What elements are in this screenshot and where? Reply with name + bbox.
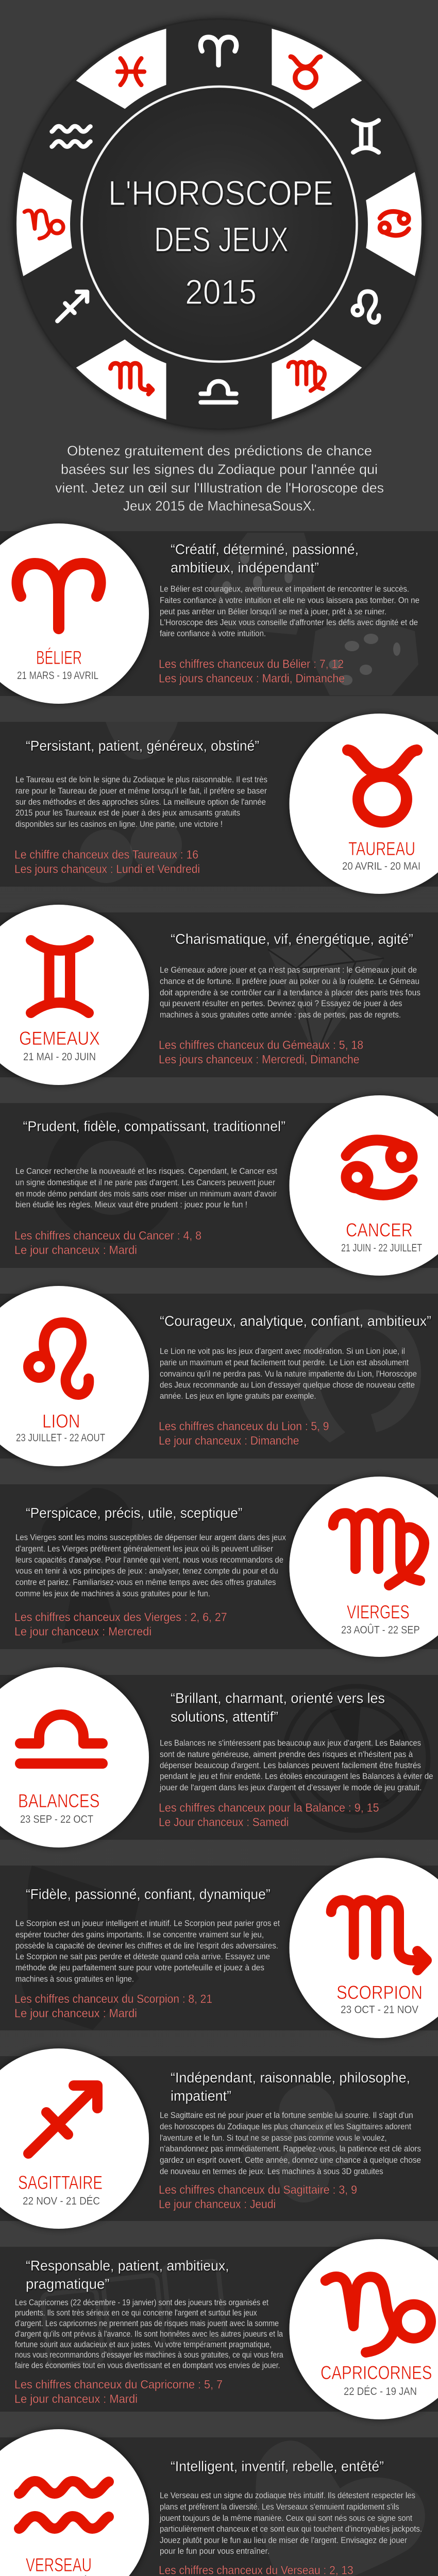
intro text: vient. Jetez un œil sur l'Illustration de l'Horoscope des [55, 480, 384, 496]
description: d'argent qu'ils ont prévus à l'avance. Ils sont honnêtes avec les autres joueurs et la [15, 2330, 283, 2339]
dates: 22 NOV - 21 DÉC [23, 2195, 100, 2207]
sign badge: Gémeaux [0, 905, 149, 1085]
description: Faites confiance à votre intuition et elle ne vous laissera pas tomber. On ne [160, 596, 419, 605]
sign name: LION [42, 1411, 80, 1432]
description: Le Lion ne voit pas les jeux d'argent avec modération. Si un Lion joue, il [160, 1347, 405, 1356]
quote: pragmatique” [26, 2276, 109, 2292]
description: machines à sous gratuites cette année : pas de pertes, pas de regrets. [160, 1010, 401, 1020]
lucky numbers and days [159, 1801, 379, 1829]
description: L'Horoscope des Jeux vous conseille d'affronter les défis avec dignité et de [160, 618, 418, 628]
dates: 21 MARS - 19 AVRIL [17, 670, 98, 682]
sign badge: Capricornes [290, 2239, 438, 2419]
lucky numbers and days [14, 848, 200, 876]
icon: libra [20, 1715, 103, 1764]
icon: virgo (wheel) [288, 362, 325, 391]
sign name: GEMEAUX [19, 1028, 100, 1049]
icon: leo (wheel) [353, 292, 379, 323]
description: gardez un esprit ouvert. Cette année, donnez une chance à quelque chose [160, 2156, 421, 2165]
icon: cancer [346, 1140, 412, 1195]
dates: 23 SEP - 22 OCT [20, 1814, 93, 1825]
panel band [0, 1103, 438, 1268]
quote: “Créatif, déterminé, passionné, [171, 541, 359, 557]
panel: Capricornes [0, 2239, 438, 2419]
white wheel segments [0, 3, 438, 446]
description: faire confiance à votre intuition. [160, 629, 266, 638]
description: Le Taureau est de loin le signe du Zodiaque le plus raisonnable. Il est très [15, 775, 267, 784]
panel band [0, 912, 438, 1077]
description: n'abandonnez pas immédiatement. Rappelez-vous, la patience est clé alors [160, 2144, 421, 2154]
panel: Balances [0, 1667, 438, 1848]
lucky numbers and days: Le chiffre chanceux des Taureaux : 16 [14, 848, 198, 861]
description: fortune sourit aux audacieux et aux justes. Vu votre tempérament pragmatique, [15, 2340, 272, 2349]
description [15, 1533, 287, 1599]
icon: aries [17, 564, 100, 629]
description [160, 584, 419, 638]
panel: Gémeaux [0, 905, 438, 1085]
description: Le Gémeaux adore jouer et ça n'est pas surprenant : le Gémeaux jouit de [160, 965, 417, 975]
sign name: SCORPION [336, 1982, 423, 2003]
description: des Jeux recommande au Lion d'essayer quelque chose de nouveau cette [160, 1381, 415, 1390]
panel: Bélier [0, 523, 438, 704]
lucky numbers and days: Les chiffres chanceux du Cancer : 4, 8 [14, 1229, 201, 1242]
dates: 23 AOÛT - 22 SEP [341, 1624, 420, 1636]
description: Les Capricornes (22 décembre - 19 janvier) sont des joueurs très organisés et [15, 2298, 268, 2307]
description: d'argent. Les capricornes ne prennent pas de risques mais jouent avec la somme [15, 2319, 279, 2328]
sign badge: Vierges [290, 1477, 438, 1657]
lucky numbers and days: Le jour chanceux : Jeudi [159, 2197, 276, 2211]
icon: capricorn [326, 2277, 431, 2352]
lucky numbers and days: Les chiffres chanceux des Vierges : 2, 6, 27 [14, 1611, 227, 1624]
panel: Cancer [0, 1095, 438, 1276]
lucky numbers and days: Les chiffres chanceux du Sagittaire : 3, 9 [159, 2183, 357, 2196]
watermark: poker chip [46, 1112, 177, 1243]
white circle [290, 1477, 438, 1657]
panel: Verseau [0, 2429, 438, 2576]
panel: Lion [0, 1286, 438, 1466]
description: pour le fun pour vous entraîner. [160, 2547, 269, 2556]
description: sur des méthodes et des approches sûres. La meilleure option de l'année [15, 798, 266, 807]
white circle [0, 1286, 149, 1466]
description: qui peuvent résulter en pertes. Devinez quoi ? Essayez de jouer à des [160, 999, 402, 1008]
description [160, 2111, 421, 2176]
lucky numbers and days [14, 1992, 212, 2020]
lucky numbers and days: Les chiffres chanceux du Lion : 5, 9 [159, 1419, 329, 1433]
quote: “Indépendant, raisonnable, philosophe, [171, 2070, 410, 2086]
quote: “Charismatique, vif, énergétique, agité” [171, 931, 413, 947]
dates: 23 OCT - 21 NOV [341, 2004, 418, 2016]
quote: ambitieux, indépendant” [171, 560, 319, 575]
watermark: diamond [268, 939, 384, 1057]
lucky numbers and days: Le jour chanceux : Mardi [14, 2392, 138, 2405]
lucky numbers and days: Les jours chanceux : Mardi, Dimanche [159, 672, 345, 685]
description: prudents. Ils sont très sérieux en ce qui concerne l'argent et surtout les jeux [15, 2309, 257, 2318]
sign name: SAGITTAIRE [18, 2172, 103, 2193]
description: bien étudié les règles. Mieux vaut être prudent : jouez pour le fun ! [15, 1200, 247, 1210]
icon: sagittarius (wheel) [57, 292, 87, 321]
sign name: BALANCES [18, 1790, 100, 1811]
quote [171, 2070, 410, 2104]
quote: “Perspicace, précis, utile, sceptique” [26, 1505, 242, 1521]
dates: 23 JUILLET - 22 AOUT [16, 1432, 105, 1444]
description: méthode de jeu parfaitement sure pour votre portefeuille et jouez à des [15, 1963, 264, 1972]
description [160, 965, 420, 1020]
description: espérer toucher des gains importants. Il se concentre vraiment sur le jeu, [15, 1930, 264, 1939]
description: faire des économies tout en vous divertissant et en domptant vos envies de jouer. [15, 2361, 280, 2370]
description: un signe domestique et il ne parie pas d'argent. Les Cancers peuvent jouer [15, 1178, 275, 1188]
sign name: CANCER [346, 1219, 413, 1241]
description: vous en tenir à vos principes de jeux : analyser, tenez compte du pour et du [15, 1567, 278, 1576]
panel band [0, 1675, 438, 1840]
panel band [0, 1484, 438, 1649]
white circle [0, 2048, 149, 2229]
panel band [0, 2437, 438, 2576]
lucky numbers and days [159, 657, 345, 685]
lucky numbers and days: Les chiffres chanceux du Gémeaux : 5, 18 [159, 1038, 363, 1052]
sign name: VERSEAU [26, 2554, 92, 2575]
icon: scorpio (wheel) [110, 363, 153, 394]
lucky numbers and days: Le jour chanceux : Dimanche [159, 1434, 299, 1447]
icon: scorpio [331, 1900, 427, 1970]
white circle [290, 2239, 438, 2419]
description: convaincu qu'il ne perdra pas. Vu la nature impatiente du Lion, l'Horoscope [160, 1369, 417, 1379]
description: en mode démo pendant des mois sans oser miser un minimum avant d'avoir [15, 1189, 277, 1198]
icon: cancer (wheel) [380, 211, 409, 235]
lucky numbers and days [14, 2378, 223, 2405]
title: DES JEUX [154, 220, 289, 259]
lucky numbers and days: Le Jour chanceux : Samedi [159, 1816, 289, 1829]
description: plans et préfèrent la diversité. Les Verseaux s'ennuient rapidement s'ils [160, 2502, 399, 2512]
description [15, 1919, 280, 1984]
description [15, 2298, 283, 2370]
description: disponibles sur les casinos en ligne. Une partie, une victoire ! [15, 820, 223, 829]
icon: capricorn (wheel) [24, 211, 63, 239]
description [159, 2491, 422, 2556]
description: Le Sagittaire est né pour jouer et la fortune semble lui sourire. Il s'agit d'un [160, 2111, 413, 2120]
sign badge: Bélier [0, 523, 149, 704]
icon: aries (wheel) [200, 37, 237, 65]
title [108, 174, 333, 312]
description [160, 1347, 417, 1401]
description [15, 775, 267, 829]
white circle [0, 523, 149, 704]
description [15, 1167, 277, 1210]
description: chance et de fortune. Il préfère jouer au poker ou à la roulette. Le Gémeau [160, 977, 419, 986]
description: des horoscopes du Zodiaque les plus chanceux et les Sagittaires adorent [160, 2122, 411, 2131]
description: Le Bélier est courageux, aventureux et impatient de rencontrer le succès. [160, 584, 409, 594]
panel band [0, 1866, 438, 2030]
icon: gemini (wheel) [353, 121, 379, 152]
intro text: Jeux 2015 de MachinesaSousX. [123, 498, 315, 514]
quote: “Courageux, analytique, confiant, ambitieux” [160, 1313, 431, 1329]
description: Le Scorpion ne sait pas perdre et déteste quand cela arrive. Essayez une [15, 1952, 270, 1961]
description: Le Scorpion est un joueur intelligent et intuitif. Le Scorpion peut parier gros et [15, 1919, 280, 1928]
quote: “Responsable, patient, ambitieux, [26, 2258, 229, 2274]
white circle [0, 1667, 149, 1848]
quote: “Persistant, patient, généreux, obstiné” [26, 738, 259, 754]
intro text: Obtenez gratuitement des prédictions de chance [67, 443, 372, 459]
description: Jouez plutôt pour le fun au lieu de miser de l'argent. Envisagez de jouer [160, 2536, 407, 2545]
quote: “Prudent, fidèle, compatissant, traditionnel” [23, 1118, 285, 1134]
panel: Taureau [0, 714, 438, 894]
dates: 21 MAI - 20 JUIN [23, 1051, 96, 1063]
lucky numbers and days: Les jours chanceux : Mercredi, Dimanche [159, 1053, 360, 1066]
panel: Scorpion [0, 1858, 438, 2038]
lucky numbers and days: Les jours chanceux : Lundi et Vendredi [14, 862, 200, 876]
description: Les Vierges sont les moins susceptibles de dépenser leur argent dans des jeux [15, 1533, 287, 1542]
quote: “Intelligent, inventif, rebelle, entêté” [171, 2459, 384, 2474]
description: comme les jeux de machines à sous gratuites pour le fun. [15, 1589, 210, 1599]
quote: “Brillant, charmant, orienté vers les [171, 1690, 385, 1706]
zodiac wheel [0, 3, 438, 446]
sign badge: Balances [0, 1667, 149, 1848]
watermark: heart [256, 2441, 425, 2576]
description: rare pour le Taureau de jouer et même lorsqu'il le fait, il préfère se baser [15, 786, 267, 795]
lucky numbers and days: Les chiffres chanceux du Capricorne : 5, 7 [14, 2378, 223, 2391]
description: année. Les jeux en ligne gratuits par exemple. [160, 1392, 316, 1401]
title: L'HOROSCOPE [108, 174, 333, 213]
white circle [290, 714, 438, 894]
white circle [290, 1095, 438, 1276]
watermark: dice [210, 533, 418, 696]
description: Le Verseau est un signe du zodiaque très intuitif. Ils détestent respecter les [160, 2491, 415, 2500]
panel band [0, 531, 438, 696]
quote [26, 2258, 229, 2292]
quote [171, 541, 359, 575]
intro text: basées sur les signes du Zodiaque pour l'année qui [61, 462, 378, 477]
white circle [0, 2429, 149, 2576]
sign badge: Sagittaire [0, 2048, 149, 2229]
lucky numbers and days: Les chiffres chanceux du Bélier : 7, 12 [159, 657, 344, 671]
icon: sagittarius [28, 2086, 97, 2154]
quote [171, 1690, 385, 1724]
lucky numbers and days [14, 1229, 201, 1257]
description: sont de nature généreuse, aiment prendre des risques et n'hésitent pas à [160, 1750, 413, 1759]
sign badge: Scorpion [290, 1858, 438, 2038]
icon: taurus (wheel) [291, 57, 321, 88]
description: Le Cancer recherche la nouveauté et les risques. Cependant, le Cancer est [15, 1167, 277, 1176]
lucky numbers and days [159, 1038, 363, 1066]
description: leurs capacités d'analyse. Pour l'année qui vient, nous vous recommandons de [15, 1555, 283, 1565]
sign badge: Lion [0, 1286, 149, 1466]
lucky numbers and days: Le jour chanceux : Mardi [14, 1243, 137, 1257]
description: 2015 pour les Taureaux est de jouer à des jeux amusants gratuits [15, 808, 240, 818]
white circle [0, 905, 149, 1085]
description [159, 1738, 433, 1792]
watermark: roulette wheel [284, 1686, 428, 1831]
icon: aquarius (wheel) [52, 126, 90, 147]
description: peut pas arrêter un Bélier lorsqu'il se met à jouer, prêt à se ruiner. [160, 607, 386, 616]
dates: 20 AVRIL - 20 MAI [342, 860, 420, 872]
watermark: slot machine [40, 2261, 226, 2366]
title: 2015 [185, 273, 257, 312]
panel: Sagittaire [0, 2048, 438, 2229]
panel: Vierges [0, 1477, 438, 1657]
lucky numbers and days: Les chiffres chanceux pour la Balance : 9, 15 [159, 1801, 379, 1814]
lucky numbers and days [14, 1611, 227, 1638]
icon: virgo [333, 1513, 424, 1585]
description: de nouveau en termes de jeux. Les machines à sous 3D gratuites [160, 2167, 383, 2176]
icon: leo [28, 1323, 89, 1395]
icon: taurus [348, 750, 417, 822]
description: nous vous recommandons d'essayer les machines à sous gratuites, ce qui vous fera [15, 2350, 283, 2360]
sign badge: Cancer [290, 1095, 438, 1276]
lucky numbers and days: Les chiffres chanceux du Scorpion : 8, 21 [14, 1992, 212, 2005]
description: jouent toujours de la même manière. Ceux qui sont nés sous ce signe sont [159, 2514, 412, 2523]
description: jouer de l'argent dans les jeux d'argent et d'essayer le mode de jeu gratuit. [159, 1783, 422, 1792]
panel band [0, 722, 438, 887]
panel band [0, 1294, 438, 1459]
sign name: VIERGES [347, 1601, 410, 1622]
description: possède la capacité de deviner les chiffres et de lire l'esprit des adversaires. [15, 1941, 278, 1951]
intro text [55, 443, 384, 514]
wheel centre disc with ring [81, 87, 357, 362]
description: d'argent. Les Vierges préfèrent généralement les jeux où ils peuvent utiliser [15, 1544, 273, 1553]
icon: aquarius [19, 2481, 109, 2529]
sign name: BÉLIER [36, 647, 82, 668]
lucky numbers and days [159, 2183, 357, 2211]
watermark: cherries [79, 722, 182, 883]
lucky numbers and days: Le jour chanceux : Mardi [14, 2006, 137, 2020]
dates: 22 DÉC - 19 JAN [344, 2386, 417, 2398]
watermark: club [20, 1866, 139, 2030]
description: contre et pariez. Familiarisez-vous en même temps avec des offres gratuites [15, 1578, 276, 1587]
icon: libra (wheel) [201, 381, 236, 402]
description: parie un maximum et peut facilement tout perdre. Le Lion est absolument [160, 1358, 409, 1367]
description: machines à sous gratuites en ligne. [15, 1974, 134, 1984]
description: doit apprendre à se contrôler car il a tendance à placer des paris très fous [160, 988, 420, 997]
wheel disc [14, 19, 424, 429]
quote: “Fidèle, passionné, confiant, dynamique” [26, 1886, 271, 1902]
description: dépenser beaucoup d'argent. Les balances peuvent facilement être frustrés [160, 1761, 421, 1770]
panel band [0, 2056, 438, 2221]
quote: solutions, attentif” [171, 1708, 278, 1724]
panel band [0, 2247, 438, 2412]
lucky numbers and days [159, 1419, 329, 1447]
lucky numbers and days: Le jour chanceux : Mercredi [14, 1625, 151, 1638]
sign badge: Taureau [290, 714, 438, 894]
white circle [290, 1858, 438, 2038]
sign badge: Verseau [0, 2429, 149, 2576]
description: l'aventure et le fun. Si tout ne se passe pas comme vous le voulez, [160, 2133, 387, 2143]
watermark: four-leaf clover [242, 2084, 363, 2202]
watermark: spade [41, 1488, 132, 1643]
quote: impatient” [171, 2088, 231, 2104]
sign name: TAUREAU [348, 838, 415, 859]
watermark: horseshoe [297, 1310, 421, 1443]
icon: pisces (wheel) [117, 58, 144, 85]
icon: gemini [31, 940, 89, 1013]
